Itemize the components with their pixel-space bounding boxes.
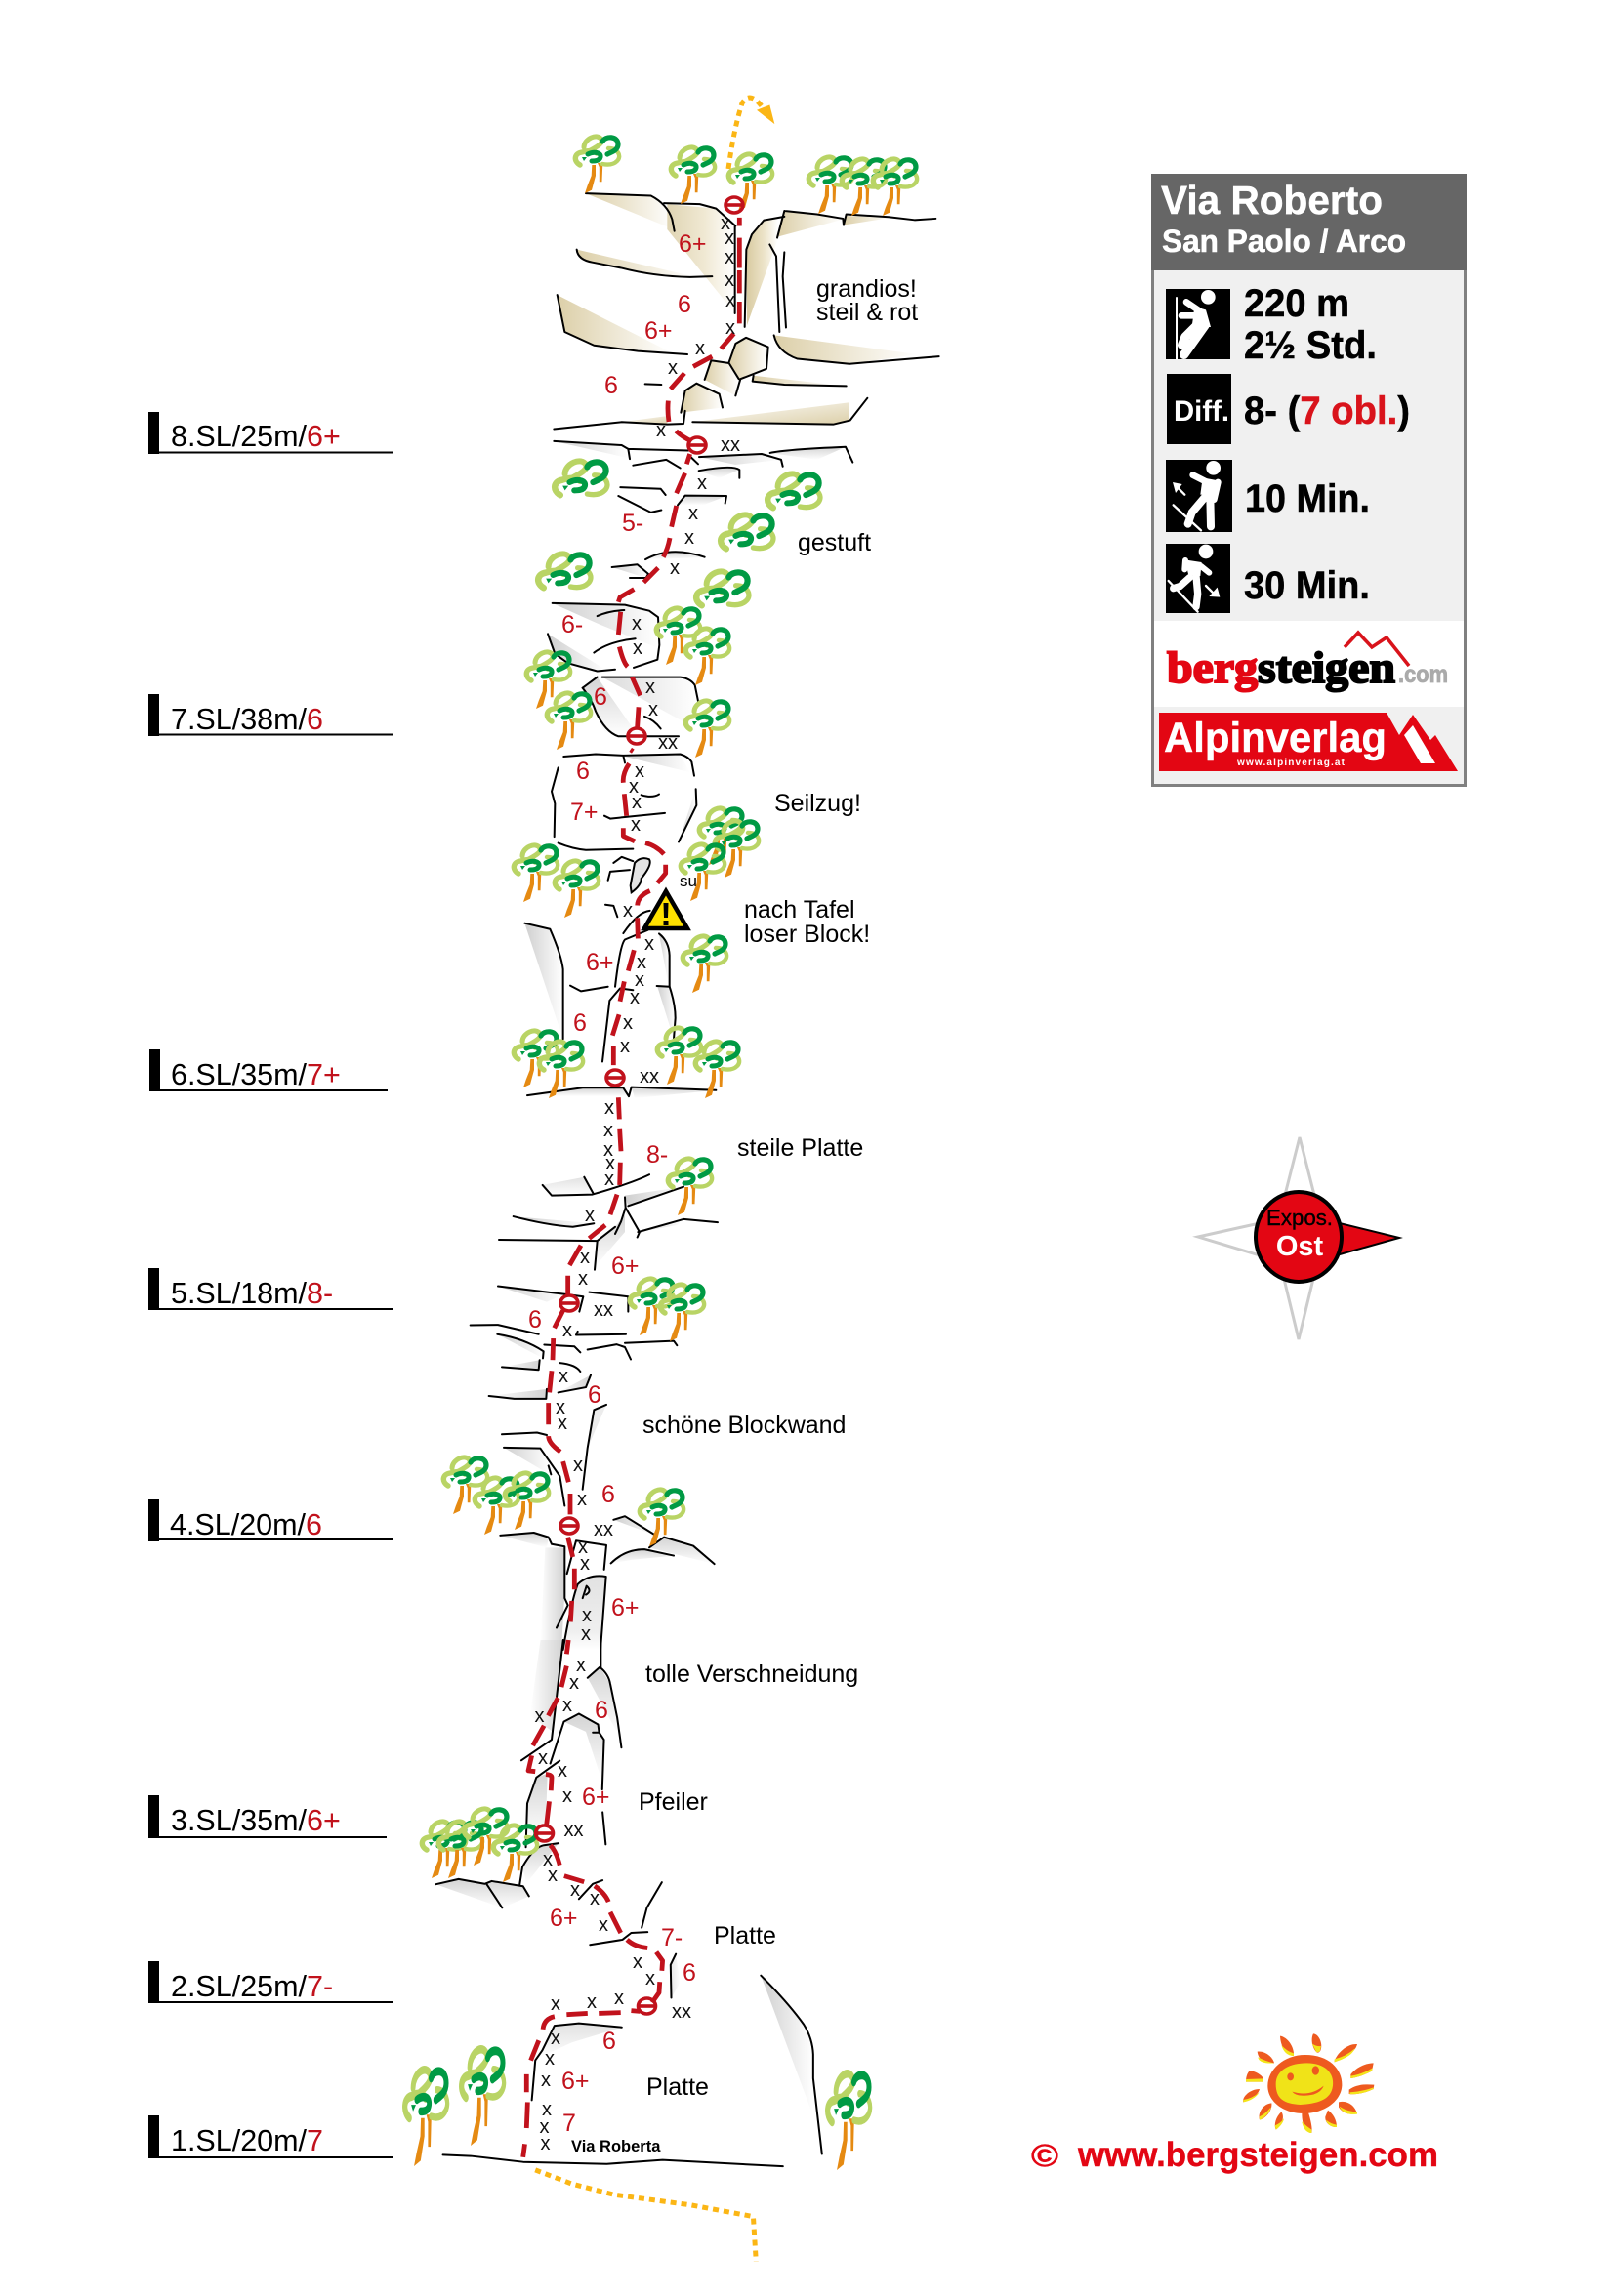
bolt marks: x xyxy=(542,2099,552,2120)
height and time xyxy=(1244,282,1377,367)
difficulty grades: 6+ xyxy=(679,230,707,258)
difficulty grades: 6+ xyxy=(550,1905,578,1932)
bolt marks: x xyxy=(604,1097,614,1119)
tree xyxy=(514,845,558,902)
bolt marks: x xyxy=(631,814,641,836)
bolt marks: x xyxy=(633,1951,642,1973)
tree xyxy=(842,159,886,216)
bolt marks: x xyxy=(582,1605,592,1626)
tree xyxy=(808,157,852,214)
header: Via Roberto xyxy=(1161,178,1383,223)
approach time: 10 Min. xyxy=(1245,477,1370,520)
tree xyxy=(695,1042,739,1098)
bolt marks: x xyxy=(635,969,644,991)
pitch label 5: 5.SL/18m/8- xyxy=(171,1277,333,1310)
bolt marks: x xyxy=(725,269,734,291)
difficulty grades: 7- xyxy=(661,1924,683,1951)
logo: Alpinverlag: Alpinverlag xyxy=(1164,715,1387,761)
route notes: Platte xyxy=(714,1922,776,1949)
tall tree xyxy=(828,2073,870,2170)
tree xyxy=(683,936,726,993)
route notes: nach Tafel xyxy=(744,896,855,923)
tree xyxy=(555,861,599,918)
bolt marks: x xyxy=(623,1012,633,1034)
belay xyxy=(606,1070,624,1086)
route notes xyxy=(571,275,918,2155)
bush xyxy=(721,514,773,549)
bolt marks: x xyxy=(670,557,680,579)
icon: approach xyxy=(1166,460,1232,532)
bolt marks: x xyxy=(543,1849,553,1870)
difficulty grades: 6+ xyxy=(644,317,673,345)
difficulty grades: 7 xyxy=(562,2110,576,2137)
icon: difficulty: Diff. xyxy=(1174,395,1229,428)
tree xyxy=(715,821,759,878)
bolt marks: x xyxy=(578,1268,588,1290)
climbing route line xyxy=(523,218,739,2157)
difficulty grades: 6+ xyxy=(561,2068,590,2095)
bolt marks: x xyxy=(548,1865,558,1886)
bolt marks: x xyxy=(633,637,642,659)
difficulty grades: 6+ xyxy=(586,949,614,976)
bolt marks: x xyxy=(538,1747,548,1769)
bolt marks: x xyxy=(545,2048,555,2070)
route notes: steil & rot xyxy=(816,299,918,326)
tree xyxy=(640,1490,683,1546)
bolt marks: x xyxy=(599,1914,608,1936)
panel: rock topo drawing xyxy=(435,193,939,2166)
tree xyxy=(685,629,729,685)
logo: bergsteigen.com xyxy=(1154,621,1464,707)
route notes: Seilzug! xyxy=(774,790,861,817)
pitch label 5 xyxy=(148,1268,393,1310)
route notes: steile Platte xyxy=(737,1134,863,1162)
bolt marks: x xyxy=(551,2028,560,2049)
descent time: 30 Min. xyxy=(1244,564,1370,607)
bolt marks: x xyxy=(570,1879,580,1901)
difficulty grades: 8- xyxy=(646,1141,668,1168)
logo: bergsteigen.com: .com xyxy=(1398,661,1448,688)
compass: exposition east: Expos. xyxy=(1266,1206,1333,1230)
bolt marks: x xyxy=(725,227,734,249)
tree xyxy=(547,693,591,750)
bolt marks: x xyxy=(558,1760,567,1782)
difficulty grades: 6 xyxy=(576,758,590,785)
icon: sun logo xyxy=(1243,2033,1374,2133)
bolt marks: x xyxy=(725,247,734,268)
tree xyxy=(668,1159,712,1215)
difficulty grades: 6- xyxy=(561,611,583,638)
bolt marks: xx xyxy=(721,434,740,456)
bolt marks: x xyxy=(551,1993,560,2015)
difficulty grades: 7+ xyxy=(570,799,599,826)
belay xyxy=(535,1825,553,1841)
tree xyxy=(873,159,917,216)
bolt marks: x xyxy=(668,357,678,379)
belay xyxy=(560,1295,578,1311)
belay xyxy=(725,197,743,213)
rock section: pitches 7 and 6 xyxy=(524,603,716,1098)
route notes: Pfeiler xyxy=(639,1788,708,1816)
bolt marks: x xyxy=(541,2070,551,2091)
belay xyxy=(628,728,645,744)
tall tree xyxy=(405,2070,447,2166)
panel: pitch labels xyxy=(148,412,393,2158)
bolt marks: x xyxy=(559,1366,568,1387)
bolt marks: x xyxy=(604,1168,614,1190)
pitch label 7 xyxy=(148,694,393,736)
bolt marks: x xyxy=(635,760,644,782)
tree xyxy=(685,701,729,758)
bolt marks: x xyxy=(581,1623,591,1645)
bolt marks: x xyxy=(684,527,694,549)
bush xyxy=(538,554,591,588)
route notes: tolle Verschneidung xyxy=(645,1660,858,1688)
bolt marks: x xyxy=(695,338,705,359)
difficulty grades: 6+ xyxy=(582,1784,610,1811)
route notes: loser Block! xyxy=(744,921,870,948)
bolt marks: x xyxy=(721,213,730,234)
route notes: su xyxy=(680,872,697,890)
difficulty grades: 6 xyxy=(588,1381,601,1409)
pitch label 6 xyxy=(149,1049,388,1091)
bush xyxy=(767,473,820,508)
pitch label 1: 1.SL/20m/7 xyxy=(171,2124,323,2157)
tree xyxy=(422,1822,466,1878)
tree xyxy=(728,154,772,211)
bolt marks: xx xyxy=(594,1519,613,1540)
bolt marks: x xyxy=(580,1553,590,1575)
difficulty grades: 6 xyxy=(683,1959,696,1987)
bolt marks: x xyxy=(644,933,654,955)
height and time: 220 m xyxy=(1244,282,1349,325)
route notes: Via Roberta xyxy=(571,2138,661,2155)
belay xyxy=(560,1518,578,1534)
rock section: pitches 5 and 4 xyxy=(471,1174,718,1650)
difficulty grades: 6 xyxy=(601,1481,615,1508)
tree xyxy=(575,137,619,193)
bolt marks: x xyxy=(697,472,707,494)
bolt marks: x xyxy=(562,1320,572,1341)
arrow: approach path bottom xyxy=(535,2170,756,2262)
pitch label 8 xyxy=(148,412,393,454)
rock section: pitches 8 and 7 top xyxy=(554,193,939,578)
tree xyxy=(505,1473,549,1530)
bolt marks: x xyxy=(539,2116,549,2138)
difficulty grades: 6 xyxy=(528,1306,542,1333)
tree xyxy=(475,1478,518,1535)
difficulty grades: 5- xyxy=(622,510,643,537)
logo: bergsteigen.com: bergsteigen xyxy=(1167,642,1395,692)
bolt marks: x xyxy=(656,420,666,441)
pitch label 1 xyxy=(148,2115,393,2158)
bolt marks: x xyxy=(637,952,646,973)
tree xyxy=(438,1822,482,1878)
difficulty grades: 6 xyxy=(604,372,618,399)
bolt marks: x xyxy=(535,1705,545,1727)
bolt marks: x xyxy=(648,699,658,720)
tree xyxy=(526,652,570,709)
bolt marks: x xyxy=(603,1120,613,1141)
tree xyxy=(657,1028,701,1085)
bolt marks xyxy=(535,213,740,2154)
bolt marks: x xyxy=(556,1397,565,1418)
belay xyxy=(639,1998,656,2014)
website credit: © xyxy=(1031,2138,1059,2173)
tree xyxy=(464,1809,508,1866)
bolt marks: x xyxy=(623,900,633,922)
pitch label 3: 3.SL/35m/6+ xyxy=(171,1804,341,1837)
tree xyxy=(671,147,715,204)
bolt marks: x xyxy=(585,1205,595,1226)
bolt marks: x xyxy=(578,1537,588,1558)
pitch label 6: 6.SL/35m/7+ xyxy=(171,1058,341,1091)
icon: difficulty xyxy=(1167,374,1231,444)
bolt marks: x xyxy=(590,1888,600,1909)
difficulty value: 8- (7 obl.) xyxy=(1244,390,1410,432)
bolt marks: x xyxy=(576,1655,586,1676)
bolt marks: x xyxy=(580,1247,590,1268)
belay stations xyxy=(535,197,743,2014)
bush xyxy=(696,571,749,605)
panel: trees xyxy=(405,137,917,2170)
pitch label 7: 7.SL/38m/6 xyxy=(171,703,323,736)
tree xyxy=(660,1285,704,1341)
pitch label 4 xyxy=(148,1499,393,1541)
compass: exposition east: Ost xyxy=(1276,1231,1324,1262)
difficulty grades xyxy=(528,230,707,2137)
bolt marks: x xyxy=(562,1695,572,1716)
tree xyxy=(514,1031,558,1087)
bolt marks: x xyxy=(577,1489,587,1510)
bolt marks: x xyxy=(645,1968,655,1989)
bolt marks: xx xyxy=(594,1299,613,1321)
belay xyxy=(688,437,706,453)
tall tree xyxy=(462,2049,504,2146)
compass: exposition east xyxy=(1198,1137,1399,1339)
route notes: gestuft xyxy=(798,529,871,556)
difficulty grades: 6 xyxy=(594,683,607,711)
route notes: schöne Blockwand xyxy=(642,1412,846,1439)
bolt marks: x xyxy=(573,1455,583,1476)
bolt marks: x xyxy=(632,792,642,813)
difficulty grades: 6 xyxy=(595,1697,608,1724)
difficulty grades: 6+ xyxy=(611,1252,640,1280)
difficulty grades: 6 xyxy=(602,2028,616,2055)
header xyxy=(1151,174,1467,270)
bush xyxy=(555,461,607,495)
bolt marks: x xyxy=(725,317,735,339)
tree xyxy=(443,1457,487,1514)
icon: climber xyxy=(1166,289,1230,359)
logo: Alpinverlag: www.alpinverlag.at xyxy=(1236,758,1346,768)
bolt marks: x xyxy=(725,290,735,311)
difficulty grades: 6 xyxy=(678,291,691,318)
tree xyxy=(493,1825,537,1882)
difficulty grades: 6+ xyxy=(611,1594,640,1621)
bolt marks: x xyxy=(620,1036,630,1057)
bolt marks: x xyxy=(688,503,698,524)
rock section: pitches 3 to 1 xyxy=(435,1640,822,2166)
difficulty grades: 6 xyxy=(573,1009,587,1037)
bolt marks: x xyxy=(562,1785,572,1807)
bolt marks: x xyxy=(605,1153,615,1174)
arrow: descent path top xyxy=(728,98,774,169)
icon: warning triangle xyxy=(644,891,687,928)
bolt marks: x xyxy=(630,987,640,1008)
route notes: Platte xyxy=(646,2073,709,2101)
route notes: grandios! xyxy=(816,275,917,303)
bolt marks: x xyxy=(632,613,642,635)
bolt marks: x xyxy=(587,1991,597,2013)
tree xyxy=(539,1042,583,1098)
bolt marks: x xyxy=(629,776,639,798)
website credit: www.bergsteigen.com xyxy=(1077,2136,1438,2174)
bolt marks: x xyxy=(541,2133,551,2154)
bolt marks: x xyxy=(645,676,655,698)
icon: descent xyxy=(1166,544,1230,613)
bolt marks: x xyxy=(603,1139,613,1161)
bolt marks: x xyxy=(569,1672,579,1694)
bolt marks: xx xyxy=(658,732,678,754)
height and time: 2½ Std. xyxy=(1244,324,1377,367)
pitch label 4: 4.SL/20m/6 xyxy=(170,1508,322,1541)
bolt marks: xx xyxy=(564,1820,584,1841)
logo: Alpinverlag xyxy=(1159,713,1458,771)
bolt marks: x xyxy=(614,1988,624,2009)
pitch label 8: 8.SL/25m/6+ xyxy=(171,420,341,453)
tree xyxy=(630,1279,674,1335)
bolt marks: xx xyxy=(672,2001,691,2023)
bolt marks: x xyxy=(558,1413,567,1434)
pitch label 3 xyxy=(148,1795,387,1838)
panel: route info xyxy=(1151,174,1467,785)
header: San Paolo / Arco xyxy=(1162,224,1406,259)
pitch label 2: 2.SL/25m/7- xyxy=(171,1970,333,2003)
bolt marks: xx xyxy=(640,1066,659,1087)
tree xyxy=(699,808,743,865)
pitch label 2 xyxy=(148,1961,393,2003)
tree xyxy=(656,608,700,665)
tree xyxy=(681,844,725,901)
